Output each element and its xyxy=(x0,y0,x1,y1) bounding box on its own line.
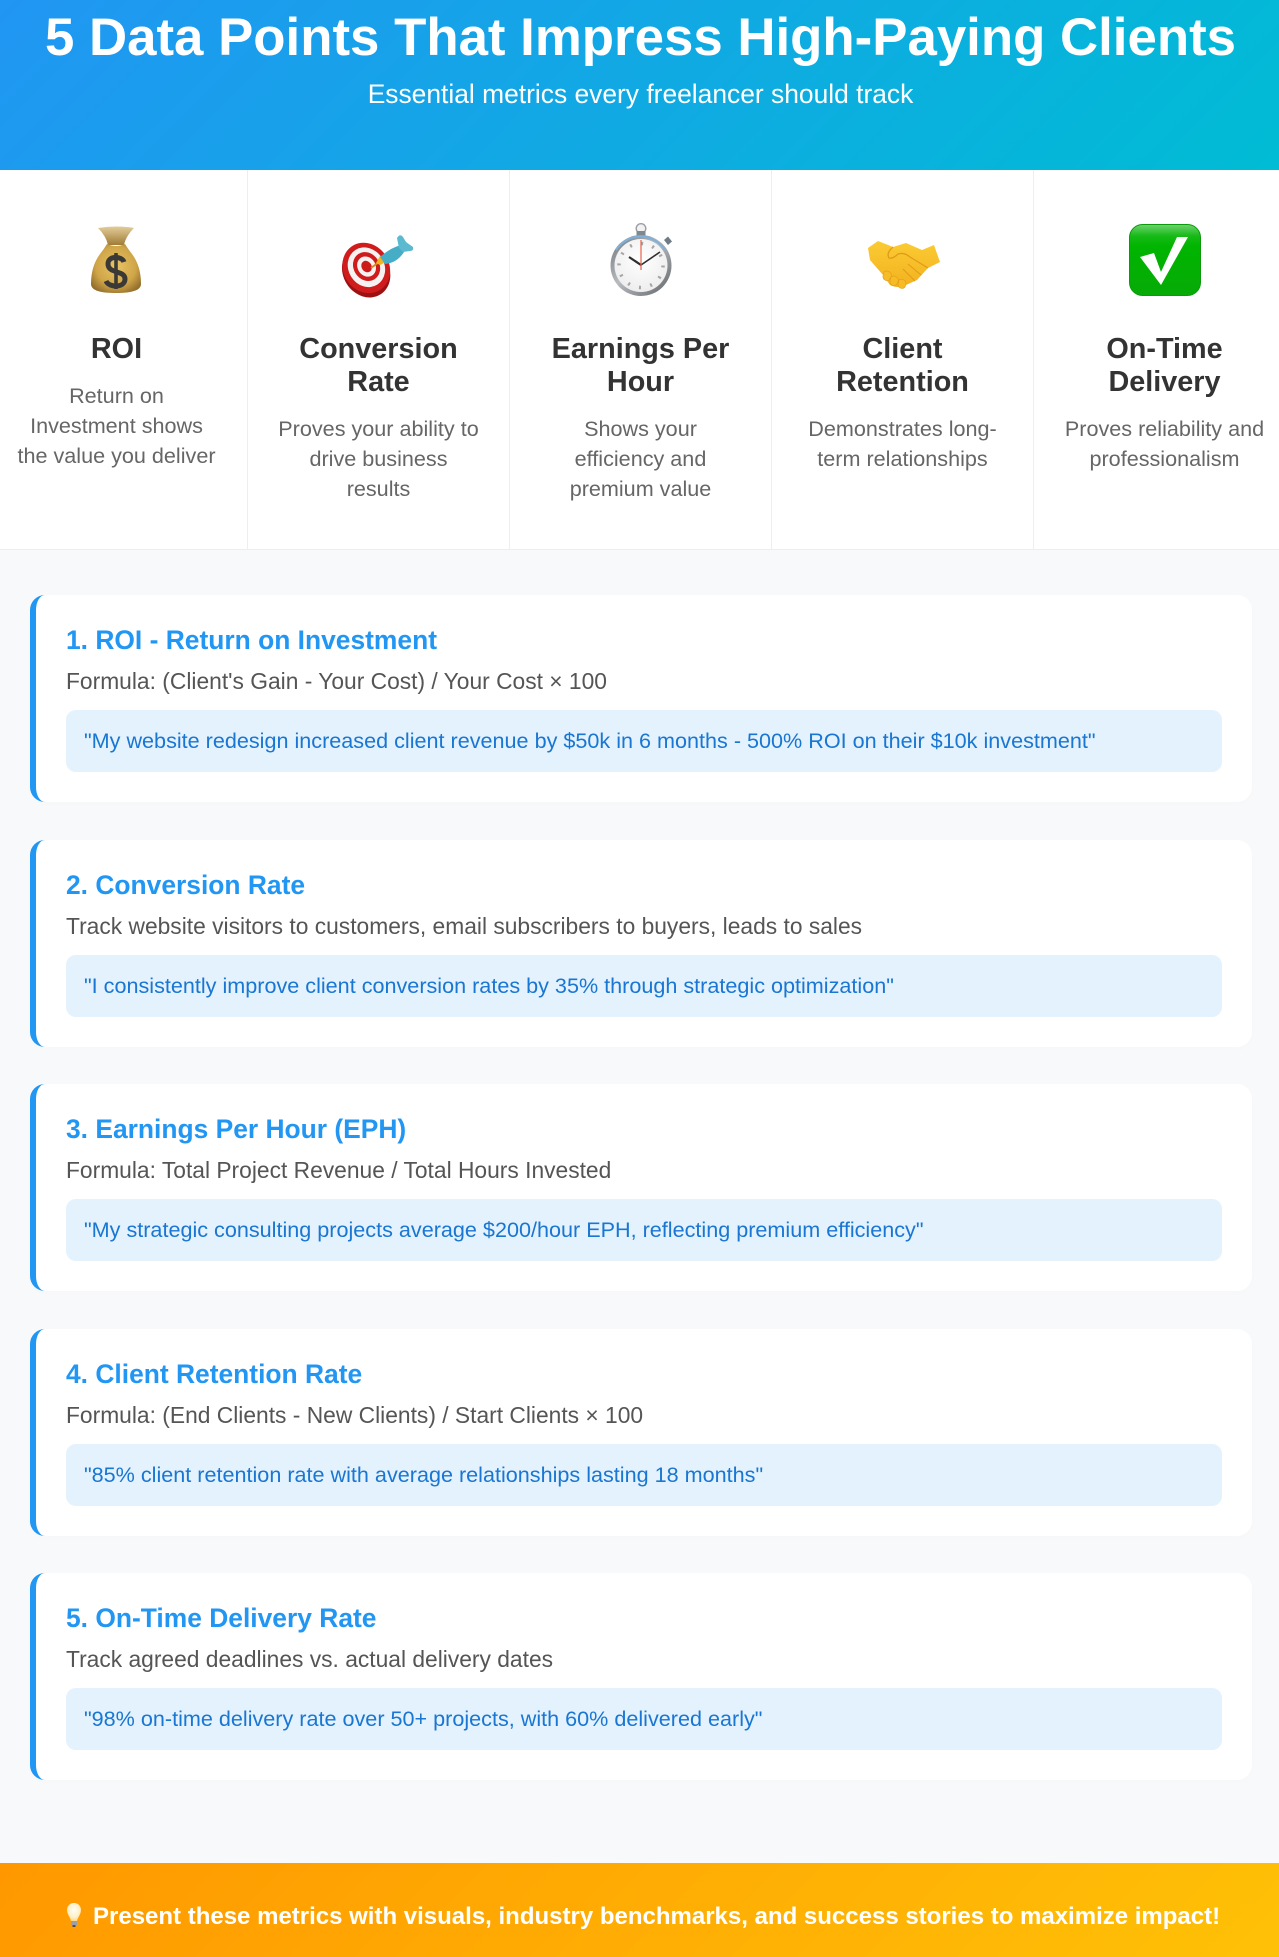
metric description: Investment shows xyxy=(30,413,203,438)
metric name: On-Time xyxy=(1106,333,1223,365)
example quote xyxy=(66,1688,1222,1750)
metric description: drive business xyxy=(309,446,448,471)
panel: Earnings Per Hour detail card xyxy=(30,1084,1252,1291)
subtitle: Essential metrics every freelancer should track xyxy=(368,79,913,109)
metric name xyxy=(299,333,458,398)
metric name: Delivery xyxy=(1108,366,1221,398)
metric name xyxy=(1106,333,1223,398)
metric description xyxy=(278,416,479,501)
metric description: term relationships xyxy=(817,446,988,471)
metric description: Return on xyxy=(69,383,164,408)
metric name: Retention xyxy=(836,366,969,398)
card heading: 2. Conversion Rate xyxy=(66,870,305,900)
example quote: "My strategic consulting projects average $200/hour EPH, reflecting premium efficiency" xyxy=(84,1217,924,1242)
card heading: 3. Earnings Per Hour (EPH) xyxy=(66,1114,406,1144)
metric description: premium value xyxy=(570,476,711,501)
card heading: 4. Client Retention Rate xyxy=(66,1359,362,1389)
column: Earnings Per Hour xyxy=(510,170,772,549)
metric description xyxy=(1065,416,1264,471)
panel: five metric overview columns xyxy=(0,170,1279,550)
header banner xyxy=(0,0,1279,170)
metric description: results xyxy=(347,476,410,501)
metric description: the value you deliver xyxy=(17,443,216,468)
icon: stopwatch xyxy=(610,223,672,296)
tracking note: Track website visitors to customers, email subscribers to buyers, leads to sales xyxy=(66,913,862,939)
metric description: efficiency and xyxy=(575,446,706,471)
icon: dart target xyxy=(342,235,414,298)
metric description xyxy=(17,383,216,468)
column: Client Retention xyxy=(772,170,1034,549)
example quote: "98% on-time delivery rate over 50+ projects, with 60% delivered early" xyxy=(84,1706,762,1731)
title: 5 Data Points That Impress High-Paying Clients xyxy=(45,8,1236,67)
metric description xyxy=(808,416,997,471)
metric description: Proves reliability and xyxy=(1065,416,1264,441)
metric name xyxy=(836,333,969,398)
example quote xyxy=(66,1444,1222,1506)
panel: Conversion Rate detail card xyxy=(30,840,1252,1047)
metric description: Shows your xyxy=(584,416,697,441)
panel: ROI detail card xyxy=(30,595,1252,802)
footer banner xyxy=(0,1863,1279,1957)
metric description: professionalism xyxy=(1089,446,1240,471)
tracking note: Track agreed deadlines vs. actual delivery dates xyxy=(66,1646,553,1672)
example quote: "I consistently improve client conversion rates by 35% through strategic optimization" xyxy=(84,973,894,998)
formula: Formula: (Client's Gain - Your Cost) / Your Cost × 100 xyxy=(66,668,607,694)
card heading: 1. ROI - Return on Investment xyxy=(66,625,437,655)
metric name: Client xyxy=(862,333,942,365)
metric description xyxy=(570,416,711,501)
metric description: Demonstrates long- xyxy=(808,416,997,441)
column: ROI xyxy=(0,170,248,549)
icon: money bag xyxy=(91,226,141,293)
formula: Formula: Total Project Revenue / Total Hours Invested xyxy=(66,1157,611,1183)
column: On-Time Delivery xyxy=(1065,224,1264,471)
example quote xyxy=(66,1199,1222,1261)
metric name: Hour xyxy=(607,366,674,398)
example quote xyxy=(66,710,1222,772)
call to action text: Present these metrics with visuals, industry benchmarks, and success stories to maximize impact! xyxy=(93,1903,1220,1930)
panel: Client Retention detail card xyxy=(30,1329,1252,1536)
example quote: "85% client retention rate with average relationships lasting 18 months" xyxy=(84,1462,763,1487)
example quote xyxy=(66,955,1222,1017)
formula: Formula: (End Clients - New Clients) / Start Clients × 100 xyxy=(66,1402,643,1428)
metric name: Conversion xyxy=(299,333,458,365)
metric description: Proves your ability to xyxy=(278,416,479,441)
icon: green check mark xyxy=(1129,224,1201,296)
card heading: 5. On-Time Delivery Rate xyxy=(66,1603,376,1633)
metric name: Rate xyxy=(347,366,410,398)
metric name: Earnings Per xyxy=(552,333,729,365)
column: Conversion Rate xyxy=(248,170,510,549)
icon: light bulb xyxy=(67,1903,81,1927)
metric name xyxy=(552,333,729,398)
example quote: "My website redesign increased client revenue by $50k in 6 months - 500% ROI on their $10k investment" xyxy=(84,728,1096,753)
metric name: ROI xyxy=(91,333,142,365)
panel: On-Time Delivery detail card xyxy=(30,1573,1252,1780)
icon: handshake xyxy=(868,241,940,289)
